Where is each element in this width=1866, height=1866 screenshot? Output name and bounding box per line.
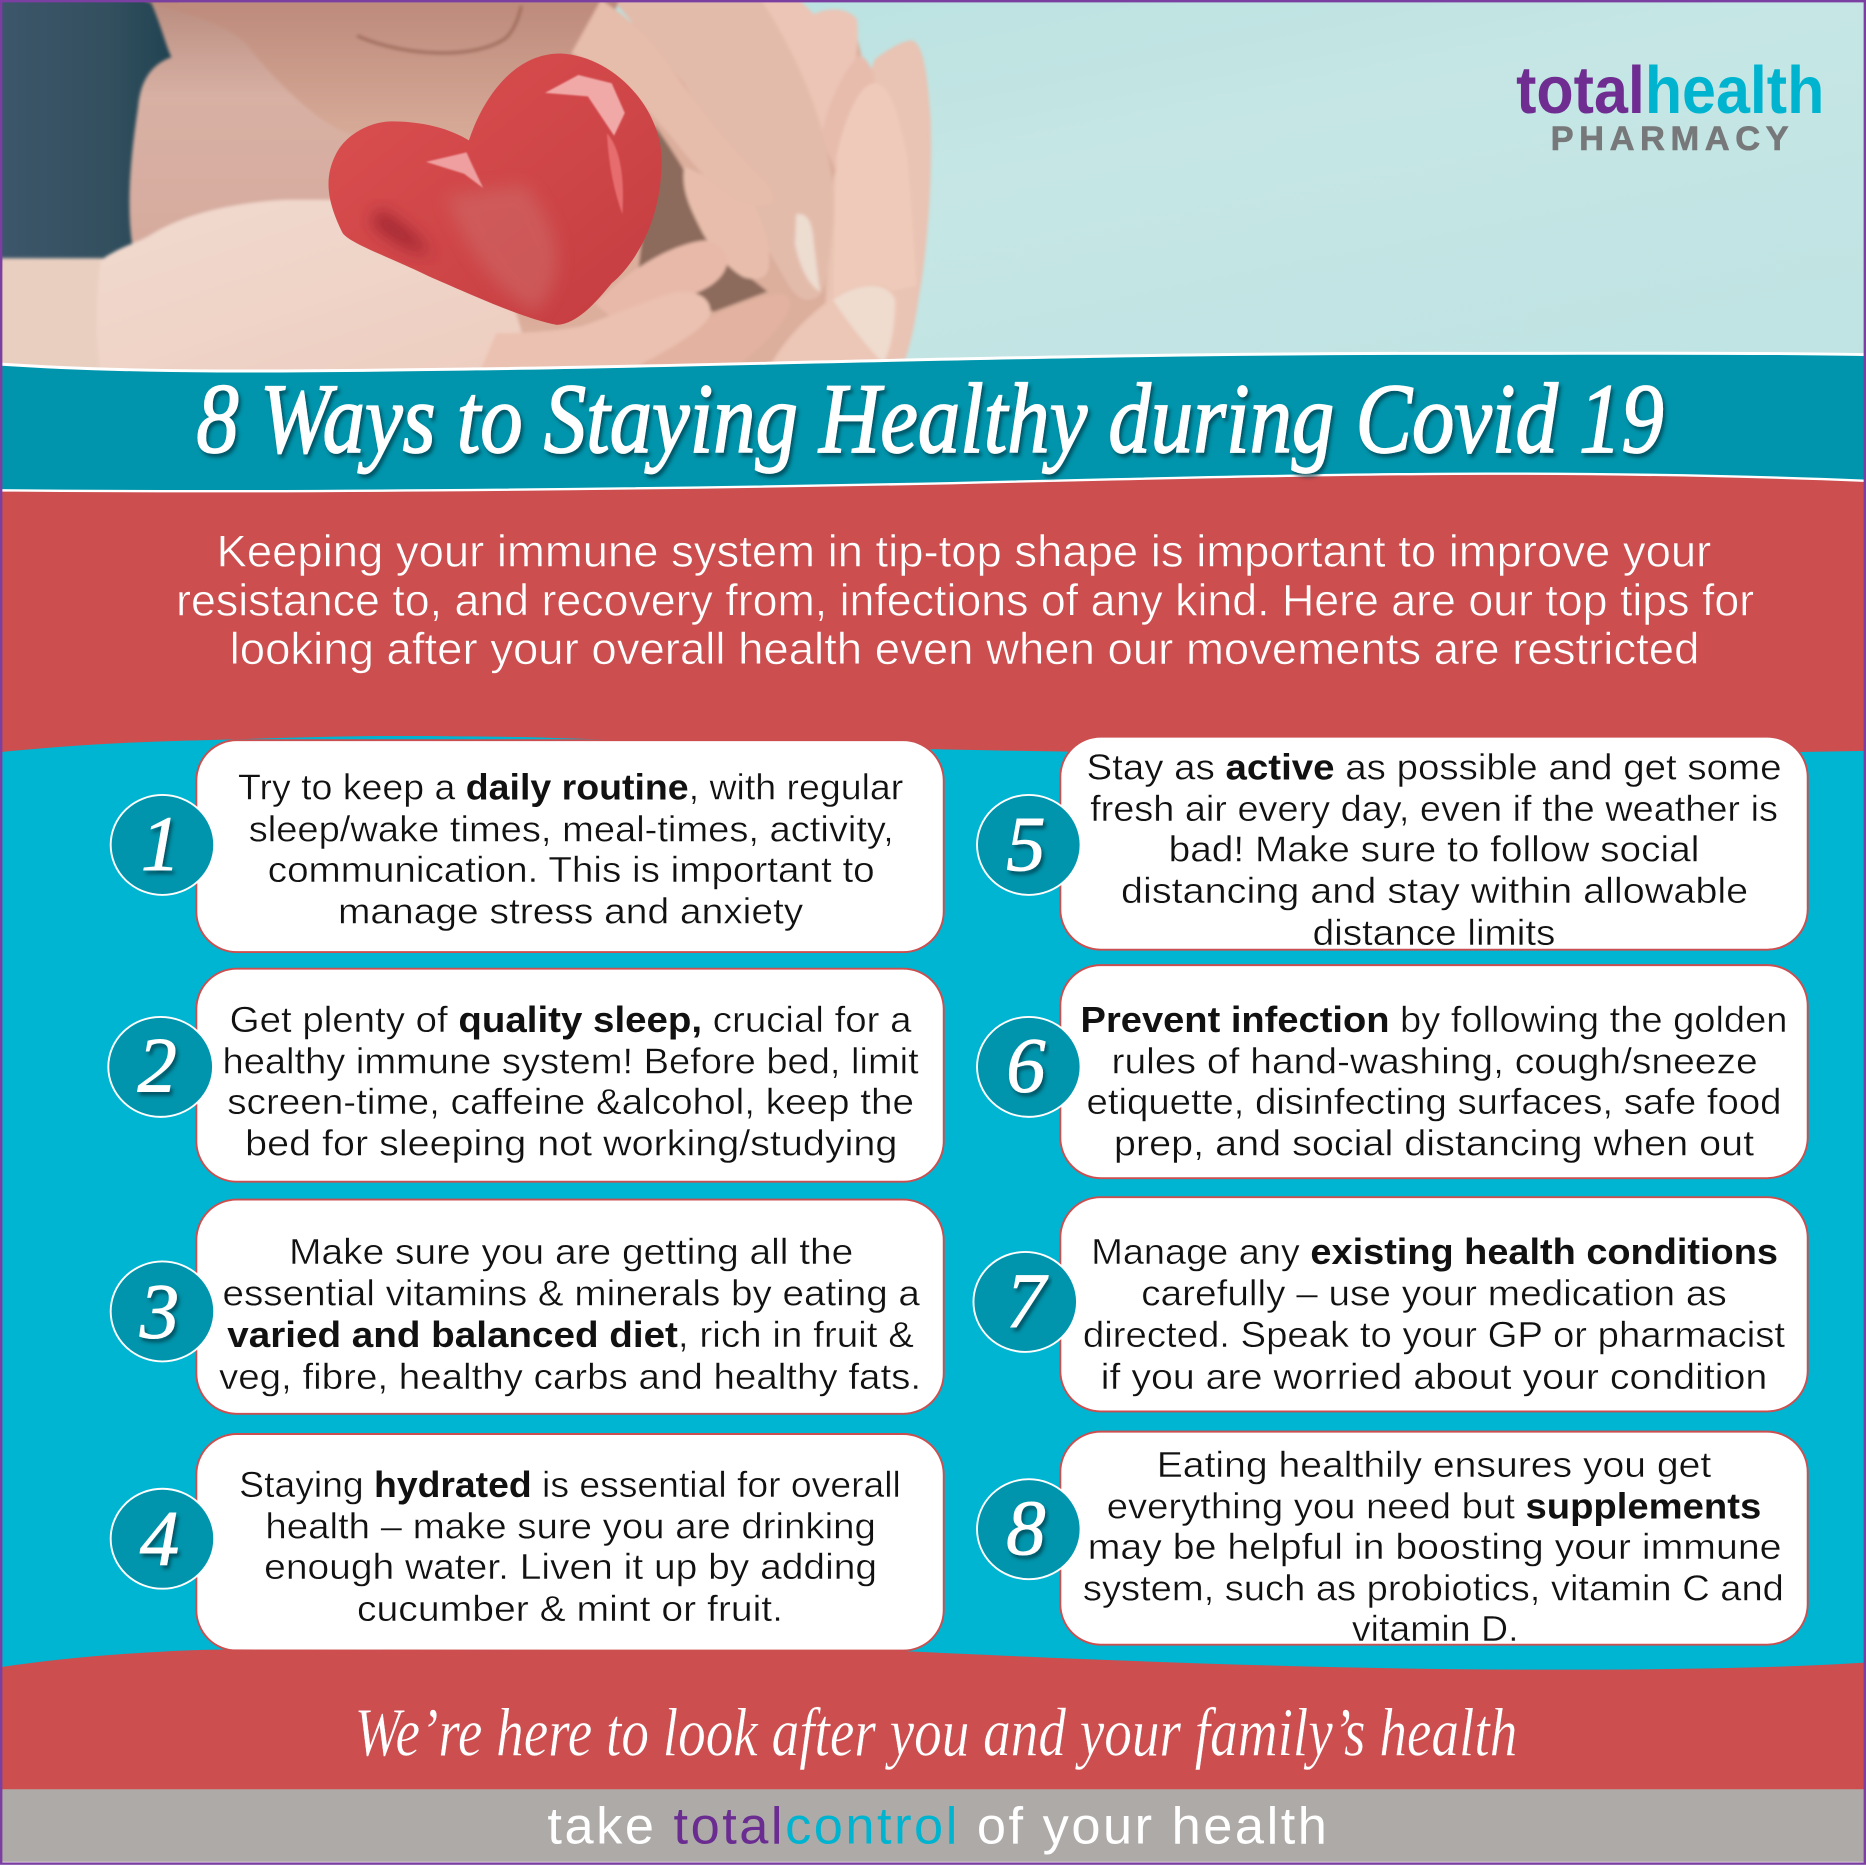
number badge 4 [111,1489,214,1589]
tip card 3: essential vitamins & minerals by eating a [223,1272,921,1313]
logo subline: PHARMACY [1551,120,1789,158]
grey tagline bar [0,1789,1866,1862]
number badge 6 [977,1017,1081,1117]
tip card 3 [196,1200,944,1414]
tip card 4: health – make sure you are drinking [265,1506,876,1547]
tip card 4: enough water. Liven it up by adding [264,1546,877,1587]
photo header: hands holding a red heart [0,0,1866,381]
number badge 6: 6 [1006,1021,1045,1108]
intro text [176,527,1754,674]
number badge 5: 5 [1006,800,1045,887]
tip card 2: Get plenty of quality sleep, crucial for a [230,999,912,1040]
intro text: Keeping your immune system in tip-top shape is important to improve your [217,527,1711,576]
tip card 8: vitamin D. [1352,1608,1519,1649]
blue tips panel [0,736,1866,1690]
number badge 8: 8 [1006,1484,1045,1571]
hands [0,0,931,381]
heart [329,54,662,325]
number badge 7 [973,1252,1077,1352]
red intro panel [0,474,1866,762]
intro text: resistance to, and recovery from, infections of any kind. Here are our top tips for [176,576,1754,625]
tip card 4: Staying hydrated is essential for overall [239,1464,901,1505]
logo wordmark: totalhealth [1516,54,1824,128]
number badge 8 [977,1479,1081,1579]
red footer panel [0,1649,1866,1791]
tip card 7: carefully – use your medication as [1141,1272,1727,1313]
number badge 1 [111,795,214,895]
number badge 1: 1 [141,800,180,887]
tip card 5: Stay as active as possible and get some [1087,746,1782,787]
number badge 3 [111,1261,214,1361]
tagline: take totalcontrol of your health [547,1797,1327,1855]
tip card 3: varied and balanced diet , rich in fruit & [227,1314,914,1355]
title band [0,353,1866,500]
tip card 4 [196,1434,944,1651]
number badge 2: 2 [137,1021,177,1108]
tip card 7 [1060,1197,1808,1411]
tip card 8: may be helpful in boosting your immune [1088,1526,1782,1567]
logo [1516,54,1824,158]
tip card 2: bed for sleeping not working/studying [245,1123,897,1164]
tip card 6: Prevent infection by following the golden [1081,999,1787,1040]
tip card 8: Eating healthily ensures you get [1157,1444,1711,1485]
tip card 8: system, such as probiotics, vitamin C and [1083,1568,1784,1609]
tip card 2 [196,969,944,1182]
dark backdrop [0,0,179,268]
tip card 5: fresh air every day, even if the weather is [1090,788,1778,829]
tip card 7: directed. Speak to your GP or pharmacist [1083,1314,1785,1355]
tip card 5: distancing and stay within allowable [1121,870,1748,911]
tip card 1: manage stress and anxiety [338,890,804,931]
number badge 7: 7 [1006,1257,1048,1344]
footer script message: We’re here to look after you and your family’s health [355,1693,1517,1770]
tip card 1: Try to keep a daily routine, with regular [238,767,903,808]
tip card 8 [1060,1432,1808,1649]
tip card 4: cucumber & mint or fruit. [357,1588,783,1629]
number badge 5 [977,795,1081,895]
photo background [614,2,1864,358]
tip card 6: prep, and social distancing when out [1114,1123,1754,1164]
tip card 1 [196,740,944,952]
number badge 2 [108,1017,213,1117]
tip card 6 [1060,965,1808,1178]
tip card 2: healthy immune system! Before bed, limit [223,1040,919,1081]
tip card 7: if you are worried about your condition [1101,1356,1767,1397]
tip card 3: veg, fibre, healthy carbs and healthy fats. [219,1356,921,1397]
tip card 8: everything you need but supplements [1107,1486,1761,1527]
number badge 4: 4 [140,1495,179,1582]
intro text: looking after your overall health even when our movements are restricted [230,625,1699,674]
tip card 5: distance limits [1313,912,1555,953]
tip card 5: bad! Make sure to follow social [1169,829,1699,870]
tip card 6: rules of hand-washing, cough/sneeze [1112,1040,1758,1081]
tip card 6: etiquette, disinfecting surfaces, safe food [1087,1081,1782,1122]
tip card 2: screen-time, caffeine &alcohol, keep the [227,1081,914,1122]
tip card 3: Make sure you are getting all the [289,1231,853,1272]
tip card 5 [1060,737,1808,953]
tip card 7: Manage any existing health conditions [1091,1231,1778,1272]
tip card 1: communication. This is important to [268,849,875,890]
tip card 1: sleep/wake times, meal-times, activity, [249,808,894,849]
number badge 3: 3 [139,1268,179,1355]
